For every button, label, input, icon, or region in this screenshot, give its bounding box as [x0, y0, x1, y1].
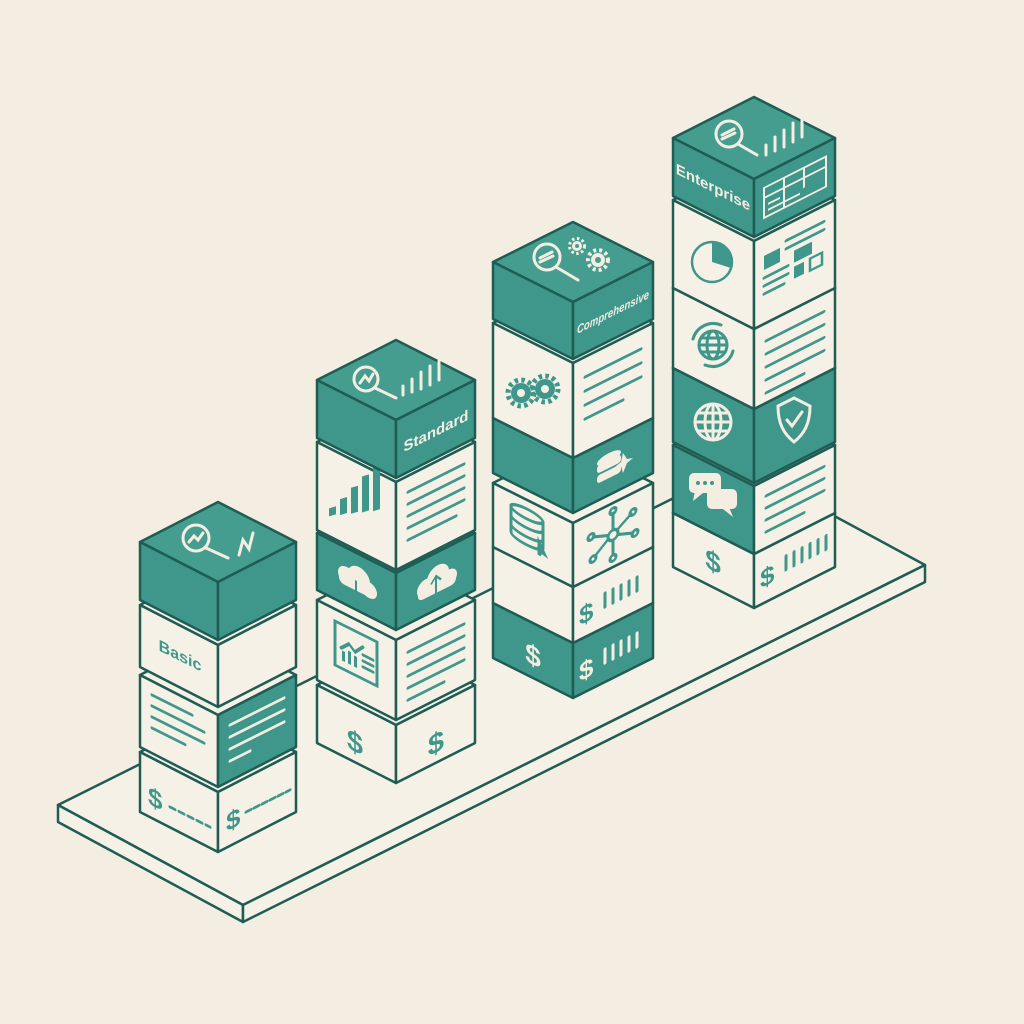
box: Standard label top: Standard	[404, 408, 468, 456]
box: comprehensive database	[493, 378, 653, 513]
platform	[58, 465, 925, 922]
box: basic top	[140, 502, 296, 640]
box: Enterprise label top: Enterprise	[676, 161, 750, 215]
box: enterprise global	[673, 247, 835, 409]
box: comprehensive features	[493, 283, 653, 458]
box: Basic label: Basic	[159, 636, 201, 675]
box: comprehensive data	[493, 443, 653, 587]
box: standard reports	[317, 560, 475, 720]
box: standard pricing	[317, 645, 475, 783]
stack: Standard	[317, 340, 475, 783]
box: Comprehensive label top	[493, 222, 653, 359]
stack: Basic	[140, 502, 296, 852]
box: Enterprise label top	[673, 97, 835, 237]
box: Basic label	[140, 565, 296, 707]
stack: Comprehensive	[493, 222, 653, 698]
box: enterprise support	[673, 404, 835, 554]
box: enterprise pricing: $	[705, 543, 721, 582]
box: basic pricing: $	[226, 801, 240, 838]
box: standard cloud	[317, 493, 475, 630]
box: enterprise analytics	[673, 159, 835, 329]
box: enterprise pricing	[673, 472, 835, 608]
box: standard pricing: $	[428, 723, 444, 764]
box: Comprehensive label top: Comprehensive	[577, 287, 649, 337]
box: comprehensive pricing tier: $	[579, 595, 593, 632]
box: standard pricing: $	[347, 722, 363, 763]
box: Standard label top	[317, 340, 475, 478]
box: standard analytics	[317, 402, 475, 570]
box: comprehensive pricing	[493, 563, 653, 698]
box: comprehensive pricing: $	[579, 651, 593, 688]
box: comprehensive pricing: $	[525, 637, 541, 676]
box: enterprise security	[673, 327, 835, 483]
box: comprehensive pricing tier	[493, 507, 653, 643]
box: basic pricing: $	[148, 780, 162, 817]
box: basic features	[140, 635, 296, 787]
box: basic pricing	[140, 712, 296, 852]
stack: Enterprise	[673, 97, 835, 608]
box: enterprise pricing: $	[760, 558, 774, 595]
